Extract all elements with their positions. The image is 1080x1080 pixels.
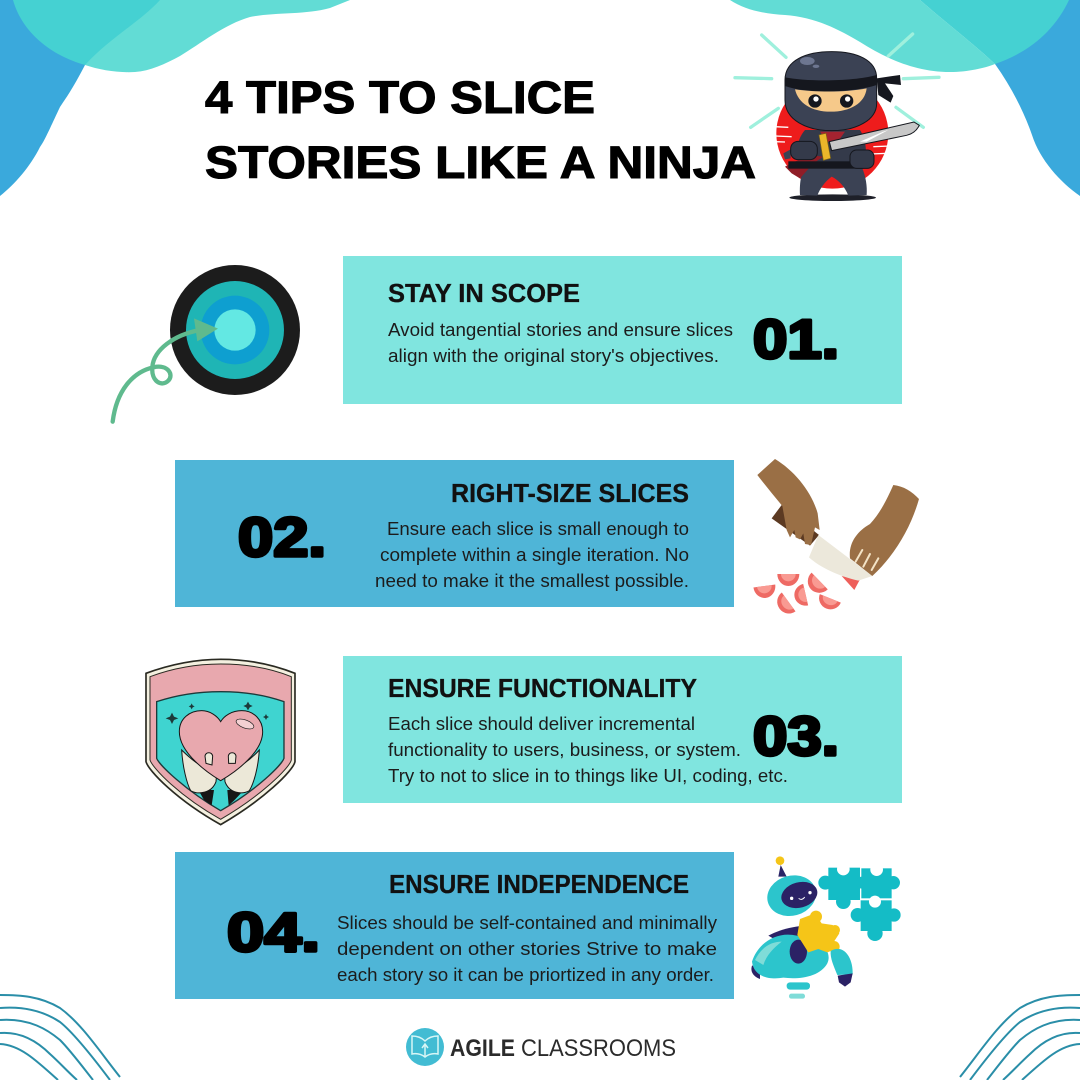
decoration: bottom-right wave lines (960, 995, 1080, 1080)
heading: right-size slices: RIGHT-SIZE SLICES (451, 480, 689, 508)
text: tip 3 description: functionality to users, business, or system. (388, 740, 741, 760)
text: tip 4 description: each story so it can be priortized in any order. (337, 965, 714, 985)
wordmark: CLASSROOMS (521, 1035, 676, 1062)
text: tip 1 description: align with the original story's objectives. (388, 346, 719, 366)
text: tip 2 description: need to make it the smallest possible. (375, 571, 689, 591)
icon: ninja with sword (735, 34, 939, 201)
text: tip 3 description (388, 714, 788, 786)
number 02: 02. (238, 506, 326, 568)
number 03: 03. (753, 705, 839, 767)
panel: tip 2 right-size slices (175, 460, 734, 607)
wordmark: AGILE (450, 1035, 515, 1062)
title: 4 TIPS TO SLICE (205, 72, 595, 123)
panel: tip 4 ensure independence (175, 852, 734, 999)
text: tip 1 description (388, 320, 733, 366)
title (205, 72, 756, 188)
panel: tip 3 ensure functionality (343, 656, 902, 803)
text: tip 2 description (375, 519, 689, 591)
title: STORIES LIKE A NINJA (205, 137, 756, 188)
icon: robot with puzzle pieces (751, 856, 901, 999)
heading: ensure independence: ENSURE INDEPENDENCE (389, 871, 689, 899)
text: tip 3 description: Try to not to slice in to things like UI, coding, etc. (388, 766, 788, 786)
number 04: 04. (227, 901, 320, 963)
top-left background blobs (0, 0, 350, 196)
heading: stay in scope: STAY IN SCOPE (388, 280, 580, 308)
logo: agile classrooms (406, 1028, 676, 1066)
text: tip 2 description: Ensure each slice is small enough to (387, 519, 689, 539)
text: tip 2 description: complete within a single iteration. No (380, 545, 689, 565)
heading: ensure functionality: ENSURE FUNCTIONALITY (388, 675, 697, 703)
icon: open book badge (406, 1028, 444, 1066)
top-right background blobs (730, 0, 1080, 196)
icon: target with curly arrow (113, 265, 300, 422)
text: tip 1 description: Avoid tangential stories and ensure slices (388, 320, 733, 340)
wordmark (450, 1035, 676, 1062)
number 01: 01. (753, 308, 839, 370)
text: tip 4 description (337, 913, 717, 985)
text: tip 4 description: dependent on other stories Strive to make (337, 939, 717, 959)
panel: tip 1 stay in scope (343, 256, 902, 404)
decoration: bottom-left wave lines (0, 995, 120, 1080)
text: tip 4 description: Slices should be self-contained and minimally (337, 913, 717, 933)
icon: shield with heart in hands (146, 659, 295, 825)
text: tip 3 description: Each slice should deliver incremental (388, 714, 695, 734)
icon: hands slicing tomato (753, 459, 919, 618)
